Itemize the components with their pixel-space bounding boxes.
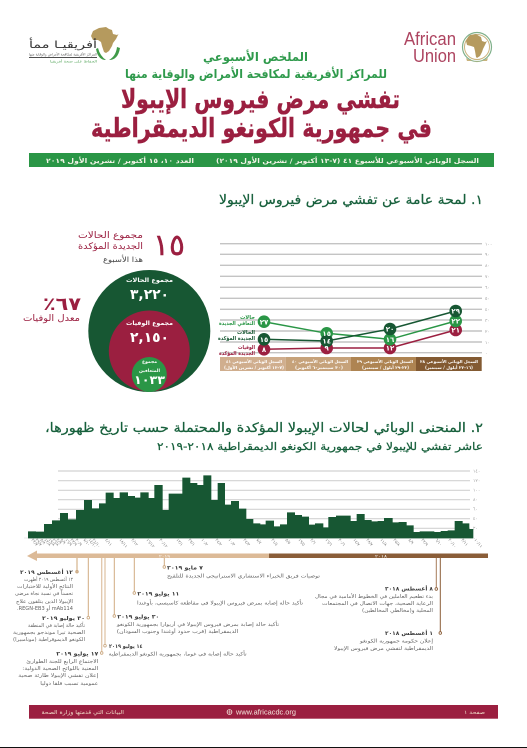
event: 30 July 2019 Tira (13, 616, 86, 643)
event: 30 July 2019 Tira: الكونغو الديموقراطية (مونامبيرا) (13, 637, 85, 643)
event: 11 July 2019: تأكيد حالة إصابة بمرض فيروس الإيبولا في مقاطعة كاسيسي، بأوغندا (137, 598, 304, 606)
line chart: weekly trend: ٤٠ (485, 308, 490, 313)
epidemic curve chart: ٢٤/٢ (214, 537, 224, 547)
line chart: weekly trend: ٢٩ (451, 308, 461, 316)
new confirmed cases stat (78, 228, 185, 264)
title: في جمهورية الكونغو الديمقراطية (91, 114, 432, 144)
epidemic curve chart: ١٠/٣ (227, 537, 237, 547)
event: 8 August 2018: ٨ أغسطس ٢٠١٨ (385, 585, 434, 593)
epidemic curve chart: ١٠/١١ (473, 537, 484, 549)
epidemic curve chart: ١٢/٨ (43, 537, 53, 547)
line chart: weekly trend: حالات (240, 315, 255, 321)
event: 8 August 2018: المحلية و(مخالطي المخالطين) (362, 608, 433, 614)
event: 11 July 2019: ١١ يوليو ٢٠١٩ (137, 592, 179, 598)
line chart: weekly trend: (٧-١٣ أكتوبر / تشرين الأول) (224, 364, 284, 370)
line chart: weekly trend: الوفيات (238, 345, 255, 351)
timeline arrow (27, 550, 488, 561)
event: 12 August 2019: النتائج الأولية للاختبارات (17, 583, 73, 590)
line chart: weekly trend: السجل الوبائي الأسبوعي ٣٨ (420, 359, 479, 364)
event: 7 May 2019: توصيات فريق الخبراء الاستشاري الاستراتيجي الجديدة للتلقيح (167, 574, 321, 580)
epidemic curve chart: ٢٩/٧ (34, 537, 44, 547)
nested circles: totals: ٢,١٥٠ (130, 330, 169, 346)
event: 8 August 2018: الرعاية الصحية، جهات الاتصال في المجتمعات (322, 601, 433, 607)
epidemic curve chart: ٢٢/٧ (30, 537, 40, 547)
epidemic curve chart: ١٩/٨ (47, 537, 57, 547)
fatality rate stat: ٦٧٪ (43, 294, 81, 315)
line chart: weekly trend: الجديدة المؤكدة (218, 335, 255, 342)
logo: Africa CDC (29, 27, 120, 64)
event: 12 August 2019: ١٢ أغسطس ٢٠١٩ أظهرت (24, 576, 73, 583)
event: 17 July 2019: ١٧ يوليو ٢٠١٩ (56, 652, 99, 658)
line chart: weekly trend: ١٠٠ (485, 242, 492, 248)
event: 12 August 2019: ١٢ أغسطس ٢٠١٩ (20, 568, 74, 576)
event: 17 July 2019: عمومية تسبب قلقا دوليا (40, 681, 98, 687)
epidemic curve chart: ٢٦/٨ (51, 537, 61, 547)
epidemic curve chart: ٧/٤ (255, 537, 263, 545)
nested circles: totals: ١٠٣٣ (134, 373, 166, 387)
nested circles: totals (88, 270, 210, 392)
epidemic curve chart: ٢٣/٩ (69, 537, 79, 547)
epidemic curve chart: ٥/٨ (39, 537, 47, 546)
epidemic curve chart: ٧/١٠ (82, 537, 91, 547)
epidemic curve chart: ٠ (473, 536, 475, 542)
line chart: weekly trend: ٢١ (451, 327, 460, 335)
line chart: weekly trend: ١٠ (485, 341, 490, 346)
event: 1 August 2018: الديمقراطية لتفشي مرض فيروس الإيبولا (334, 646, 433, 652)
event: 8 August 2018: بدء تطعيم العاملين في الخطوط الأمامية في مجال (315, 593, 433, 600)
new confirmed cases stat: ١٥ (153, 228, 185, 263)
line chart: weekly trend: الجديدة المؤكدة (219, 350, 255, 357)
footer bar: صفحة ١ (464, 710, 485, 716)
line chart: weekly trend: ٢٠ (386, 326, 394, 334)
epidemic curve chart: ٢١/١٠ (91, 537, 102, 549)
epidemic curve chart: ٢٨/٧ (365, 537, 375, 547)
timeline connectors (76, 558, 442, 654)
line chart: weekly trend: (٣٠ سبتمبر-٦ أكتوبر) (295, 364, 343, 370)
logo: Africa CDC: الحفاظ على صحة أفريقيا (50, 58, 97, 64)
line chart: weekly trend: ٣٠ (485, 318, 490, 324)
logo: Africa CDC: المراكز الأفريقية لمكافحة الأمراض والوقاية منها (29, 52, 97, 56)
new confirmed cases stat: مجموع الحالات (78, 231, 143, 241)
event: 17 July 2019: المعنية باللوائح الصحية الدولية: (22, 666, 98, 672)
epidemic curve chart: ١٠/٢ (200, 537, 210, 547)
line chart: weekly trend: ٧٠ (485, 275, 490, 280)
title: تفشي مرض فيروس الإيبولا (121, 85, 400, 115)
epidemic curve chart: ١٤٠ (473, 470, 480, 474)
epidemic curve chart: ٢٠/١٠ (447, 537, 458, 549)
epidemic curve chart: ١٨/١١ (118, 537, 129, 549)
event: 1 August 2018: إعلان حكومة جمهورية الكونغو (359, 638, 434, 644)
heading: section 2: ٢. المنحنى الوبائي لحالات الإيبولا المؤكدة والمحتملة حسب تاريخ ظهورها، (45, 421, 483, 436)
event: 30 July 2019 Ariwara (116, 615, 280, 635)
epidemic curve chart: ٢٤/٣ (242, 537, 252, 547)
line chart: weekly trend: ٠ (485, 352, 487, 356)
epidemic curve chart: ٣٠/٩ (74, 537, 84, 547)
epidemic curve chart: ١٤/١٠ (87, 537, 98, 549)
epidemic curve chart: ١٩/٥ (297, 537, 306, 547)
epidemic curve chart: ٦/١٠ (434, 537, 443, 547)
epidemic curve chart: ١٦/١٢ (145, 537, 156, 549)
line chart: weekly trend: الحالات (237, 330, 255, 336)
nested circles: totals: مجموع الحالات (126, 277, 173, 284)
epidemic curve chart: ٢٠ (473, 526, 478, 532)
epidemic curve chart: ٢/٩ (55, 537, 63, 546)
event: 14 July 2019: تأكيد حالة إصابة في غوما، بجمهورية الكونغو الديمقراطية (109, 650, 247, 658)
event: 30 July 2019 Ariwara: ٣٠ يوليو ٢٠١٩ (117, 615, 159, 621)
line chart: weekly trend: السجل الوبائي الأسبوعي ٣٩ (357, 359, 414, 364)
line chart: weekly trend: ٢٧ (260, 318, 269, 326)
subtitle (125, 49, 387, 82)
epidemic curve chart: ١٣/١ (175, 537, 184, 547)
heading: section 1: ١. لمحة عامة عن تفشي مرض فيروس الإيبولا (219, 193, 483, 208)
line chart: weekly trend: ٦٠ (485, 286, 490, 291)
line chart: weekly trend: (٢٣-٢٩ أيلول / سبتمبر) (362, 364, 409, 370)
event: 1 August 2018 (334, 629, 434, 652)
issue banner: العدد ١٠، ١٥ أكتوبر / تشرين الأول ٢٠١٩ (46, 156, 194, 165)
epidemic curve chart: ٢٥/٨ (392, 537, 402, 547)
heading: section 2: عاشر تفشي للإيبولا في جمهورية الكونغو الديمقراطية ٢٠١٨-٢٠١٩ (157, 441, 483, 453)
line chart: weekly trend: ٩ (325, 345, 330, 353)
event: 17 July 2019: إعلان تفشي الإيبولا طارئة صحية (18, 673, 99, 679)
footer bar: البيانات التي قدمتها وزارة الصحة (42, 710, 125, 716)
event: 12 August 2019 (15, 568, 74, 612)
epidemic curve chart: ٢/١٢ (130, 537, 140, 547)
nested circles: totals: ٣,٢٢٠ (130, 287, 169, 303)
footer bar: www.africacdc.org (235, 710, 296, 716)
subtitle: للمراكز الأفريقية لمكافحة الأمراض والوقاية منها (125, 66, 387, 82)
event: 17 July 2019 (18, 652, 99, 687)
line chart: weekly trend: ١٤ (322, 338, 331, 346)
event: 30 July 2019 Ariwara: تأكيد حالة إصابة بمرض فيروس الإيبولا في أريوارا بجمهورية الكونغو (116, 620, 280, 628)
event: 30 July 2019 Tira: ٣٠ يوليو ٢٠١٩ (42, 616, 85, 622)
event: 30 July 2019 Ariwara: الديمقراطية (قرب حدود أوغندا وجنوب السودان) (117, 628, 238, 635)
event: 7 May 2019: ٧ مايو ٢٠١٩ (167, 566, 204, 572)
line chart: weekly trend: التعافي الجديدة (219, 321, 255, 327)
event: 30 July 2019 Tira: الصحية تيرا موندجو بجمهورية (13, 630, 85, 636)
line chart: weekly trend: (١٦-٢٢ أيلول / سبتمبر) (425, 364, 473, 370)
epidemic curve chart: ٦٠ (473, 508, 478, 512)
event: 12 August 2019: تحسناً في نسبة نجاة مرضى (15, 589, 74, 597)
epidemic curve chart: ٤٠ (473, 517, 478, 522)
epidemic curve chart (24, 470, 484, 549)
epidemic curve chart: ٨٠ (473, 498, 478, 503)
event: 8 August 2018 (315, 585, 434, 614)
epidemic curve chart: ٢٧/١ (187, 537, 196, 547)
logo: African Union: African (404, 29, 456, 49)
epidemic curve chart: ٥/٥ (284, 537, 292, 545)
event: 14 July 2019 (109, 644, 247, 658)
line chart: weekly trend: ٥٠ (485, 297, 490, 302)
event: 30 July 2019 Tira: تأكيد حالة إصابة في المنطقة (28, 621, 86, 629)
epidemic curve chart: ٢١/٤ (270, 537, 279, 547)
epidemic curve chart: ١٤/٧ (352, 537, 362, 547)
footer bar (29, 705, 498, 719)
event: 11 July 2019 (137, 592, 304, 606)
timeline arrow: ٢٠١٩ (159, 554, 170, 559)
event: 1 August 2018: ١ أغسطس ٢٠١٨ (385, 629, 433, 637)
epidemic curve chart: ١٦/٩ (64, 537, 74, 547)
epidemic curve chart: ٢٢/٩ (420, 537, 430, 547)
logo: African Union: Union (413, 46, 456, 66)
line chart: weekly trend: السجل الوبائي الأسبوعي ٤١ (226, 359, 283, 364)
line chart: weekly trend: ٢٠ (485, 330, 490, 335)
issue banner (29, 153, 494, 167)
line chart: weekly trend: ٨ (262, 346, 267, 354)
event: 12 August 2019: الإيبولا الذين يتلقون علاج (16, 599, 73, 605)
heading: section 2 (45, 421, 483, 453)
title (91, 85, 432, 144)
fatality rate stat (23, 294, 81, 324)
line chart: weekly trend: السجل الوبائي الأسبوعي ٤٠ (292, 359, 349, 364)
logo: African Union (404, 29, 492, 66)
epidemic curve chart: ١٦/٦ (324, 537, 334, 547)
line chart: weekly trend: ١٢ (386, 345, 395, 353)
nested circles: totals: المتعافين (139, 369, 160, 374)
logo: Africa CDC: أفريقيـا ممأ (29, 37, 97, 51)
nested circles: totals: مجموع الوفيات (126, 320, 173, 327)
event: 12 August 2019: mAb114 أو REGN-EB3. (17, 605, 73, 612)
epidemic curve chart: ١٠٠ (473, 488, 480, 494)
epidemic curve chart: ٣/١١ (460, 537, 469, 547)
subtitle: الملخص الأسبوعي (203, 49, 308, 65)
line chart: weekly trend: ٩٠ (485, 253, 490, 258)
line chart: weekly trend: ٢٢ (451, 318, 461, 326)
epidemic curve chart: ٣٠/٦ (337, 537, 347, 547)
nested circles: totals: مجموع (142, 360, 157, 365)
epidemic curve chart: ٣٠/١٢ (158, 537, 169, 549)
line chart: weekly trend: ١٥ (322, 330, 331, 338)
line chart: weekly trend: ١٦ (386, 336, 395, 344)
timeline arrow: ٢٠١٨ (375, 554, 387, 559)
epidemic curve chart: ١٢٠ (473, 479, 480, 484)
new confirmed cases stat: الجديدة المؤكدة (78, 242, 143, 252)
event: 14 July 2019: ١٤ يوليو ٢٠١٩ (109, 644, 142, 650)
event: 17 July 2019: الاجتماع الرابع للجنة الطوارئ (26, 659, 98, 665)
epidemic curve chart: ٤/١١ (104, 537, 113, 547)
epidemic curve chart: ١١/٨ (379, 537, 389, 547)
epidemic curve chart: ٨/٩ (407, 537, 415, 546)
event: 7 May 2019 (167, 566, 321, 580)
fatality rate stat: معدل الوفيات (23, 314, 80, 324)
new confirmed cases stat: هذا الأسبوع (103, 254, 143, 264)
issue banner: السجل الوبائي الأسبوعي للأسبوع ٤١ (٧-١٣ أكتوبر / تشرين الأول ٢٠١٩) (216, 156, 479, 165)
epidemic curve chart: ٢/٦ (309, 537, 317, 546)
line chart: weekly trend: ١٥ (260, 336, 268, 344)
epidemic curve chart: ٩/٩ (59, 537, 67, 546)
line chart: weekly trend: ٨٠ (485, 264, 490, 269)
line chart: weekly trend (218, 242, 492, 371)
